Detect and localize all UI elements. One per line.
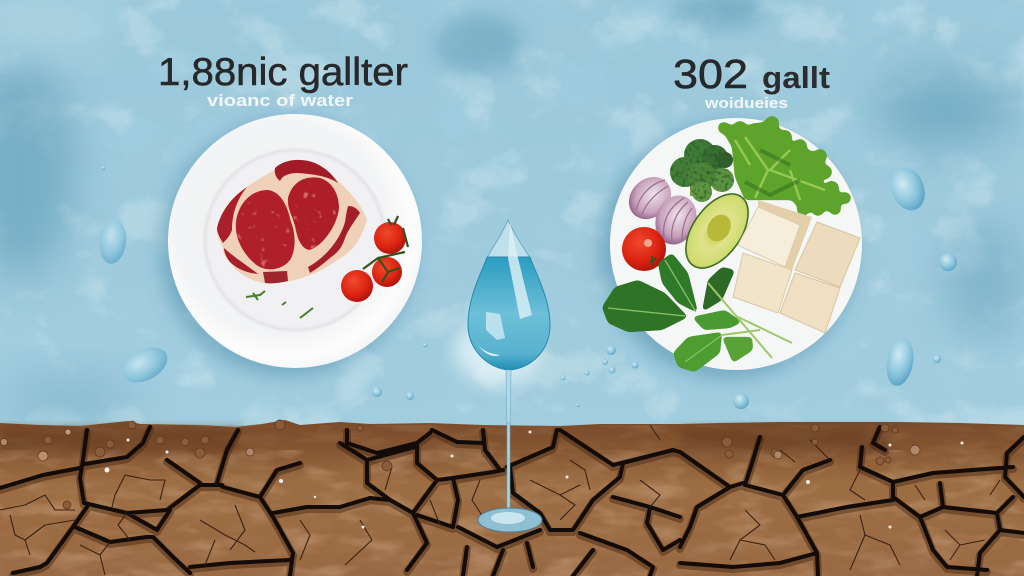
- white plate: [610, 118, 862, 370]
- plate well: [205, 150, 385, 330]
- drop glow: [454, 316, 538, 384]
- glass tip: [487, 220, 530, 258]
- panel: plant plate: [600, 116, 862, 379]
- droplet right small: [939, 253, 957, 271]
- water puddle: [478, 508, 542, 532]
- droplet left upper: [97, 218, 129, 266]
- white plate: [168, 114, 422, 368]
- right unit: gallt: [762, 60, 830, 95]
- plate shadow: [160, 120, 416, 376]
- broccoli: [670, 139, 734, 202]
- herb garnish: [246, 291, 313, 318]
- crack shadows: [0, 429, 1024, 576]
- fine cracks: [0, 425, 1000, 575]
- bottom highlight: [478, 345, 500, 356]
- heading: right plant statistic: [673, 51, 830, 112]
- red onions: [620, 168, 703, 250]
- central water drop: [454, 220, 550, 515]
- droplet right lower: [883, 336, 917, 388]
- soil clumps: [0, 420, 920, 509]
- heading: left meat statistic: [158, 51, 408, 110]
- left figure: 1,88nic gallter: [158, 51, 408, 94]
- tiny droplets: [101, 166, 941, 407]
- spinach leaves: [602, 253, 792, 372]
- steak: [217, 160, 367, 283]
- soil base: [0, 420, 1024, 576]
- drop body: [468, 257, 550, 370]
- plate shadow: [600, 123, 856, 379]
- droplets on wall: [97, 163, 957, 409]
- reflection lower: [486, 312, 505, 340]
- avocado: [673, 183, 761, 279]
- right figure: 302: [673, 51, 748, 97]
- main cracks: [0, 427, 1024, 576]
- background: mottled blue wall: [0, 0, 1024, 430]
- cherry tomatoes: [341, 216, 408, 302]
- lettuce: [718, 116, 851, 216]
- reflection: [508, 222, 532, 319]
- droplet bottom centre: [733, 393, 749, 409]
- water stream on soil: [507, 423, 510, 515]
- soil light shading: [0, 450, 1024, 576]
- white specks: [104, 430, 964, 528]
- left caption: vioanc of water: [207, 92, 354, 110]
- droplet left lower: [117, 340, 173, 390]
- panel: cracked dry soil: [0, 420, 1024, 576]
- tofu blocks: [733, 200, 860, 333]
- soil dark shading: [0, 425, 1024, 576]
- stream: [506, 370, 511, 515]
- tomato: [622, 227, 666, 271]
- panel: meat plate: [160, 114, 422, 376]
- dark upper band: [0, 428, 890, 452]
- droplet right upper: [885, 163, 931, 215]
- right caption: woidueies: [704, 96, 788, 112]
